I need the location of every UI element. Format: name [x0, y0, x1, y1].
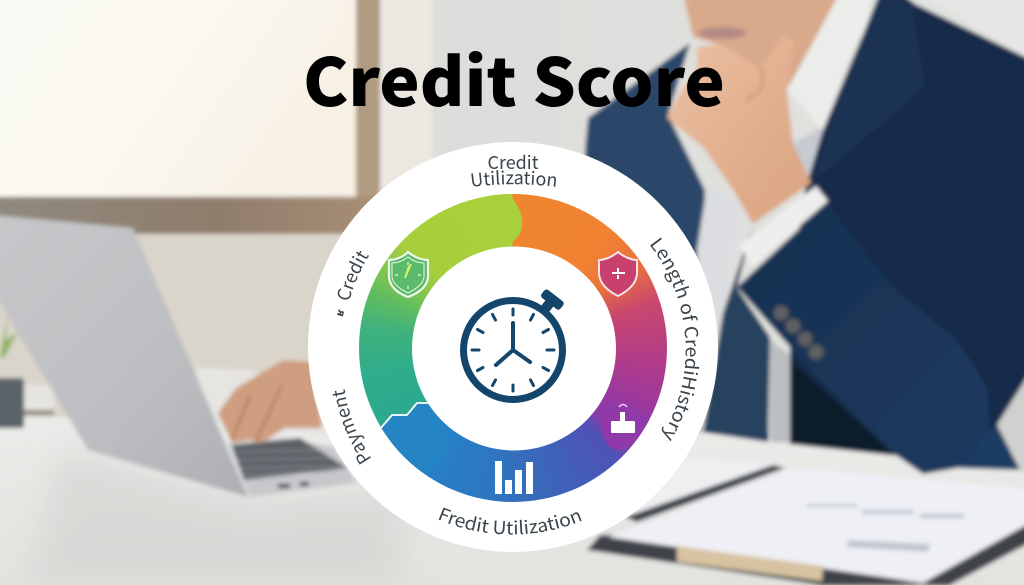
icon: stopwatch [464, 288, 565, 400]
chair [997, 350, 1024, 475]
purple blob [600, 405, 650, 450]
clip [677, 546, 823, 581]
wall [0, 0, 1024, 430]
label: Credit left: Credit [338, 250, 369, 300]
keyboard [232, 438, 347, 480]
icon: pink shield [599, 252, 637, 296]
keyboard keys [238, 450, 340, 475]
laptop base [228, 438, 357, 497]
laptop shadow [30, 450, 400, 585]
laptop ports [278, 482, 309, 488]
left jacket [585, 43, 705, 432]
finger gaps [232, 385, 282, 441]
lower right jacket [960, 425, 1020, 470]
lime blob edge [488, 194, 522, 242]
label: Length of Credit History: Length of CrediHistory [650, 238, 700, 442]
lapel [813, 0, 925, 182]
stepped white edge [380, 403, 430, 429]
ring overlays, icons and labels [332, 154, 700, 535]
cuff [740, 186, 828, 267]
finger shadow [745, 68, 763, 100]
blue stepped fill [381, 404, 428, 474]
window frame side [356, 0, 380, 234]
plant pot [0, 378, 24, 428]
right wall [905, 0, 1024, 70]
inner white circle [412, 246, 616, 450]
jacket buttons [774, 306, 824, 360]
clipboard [587, 522, 1024, 585]
sheet lines [807, 504, 964, 552]
label: Credit Utilization top: Credit [488, 149, 539, 175]
main sheet [608, 468, 1024, 583]
hand [667, 36, 811, 224]
small tray [22, 385, 54, 411]
right jacket [790, 0, 1024, 471]
icon: green shield clock [389, 252, 428, 297]
shirt strip [770, 340, 790, 443]
window [0, 0, 356, 196]
collar [787, 0, 872, 130]
icon: small white tower [611, 404, 635, 433]
dark gap under sleeve [790, 360, 895, 455]
tie upper [790, 127, 823, 180]
lower wall [0, 232, 600, 422]
title: Credit Score [303, 30, 725, 126]
label: Credit Utilization bottom: Fredit Utilization [438, 508, 582, 535]
laptop lid [0, 214, 248, 497]
paper stack [630, 457, 773, 517]
face [680, 0, 852, 85]
shirt [697, 187, 740, 400]
label: small mark: ʁ [333, 307, 348, 318]
window frame bottom [0, 197, 380, 234]
lips [698, 27, 746, 39]
colour ring [359, 194, 667, 502]
label: Payment: Payment [332, 389, 371, 465]
stack spine [625, 465, 785, 522]
tie / inner jacket [703, 228, 770, 442]
plant [0, 314, 18, 360]
label: Credit Utilization top: Utilization [471, 170, 556, 187]
wall band next to window [380, 0, 432, 220]
label: Credit Utilization top [471, 149, 556, 187]
typing hand [218, 360, 322, 443]
sleeve [737, 203, 990, 474]
icon: bar chart [495, 461, 533, 494]
circular credit score wheel [308, 142, 718, 552]
desk far surface [195, 368, 360, 440]
desk [0, 416, 1024, 585]
